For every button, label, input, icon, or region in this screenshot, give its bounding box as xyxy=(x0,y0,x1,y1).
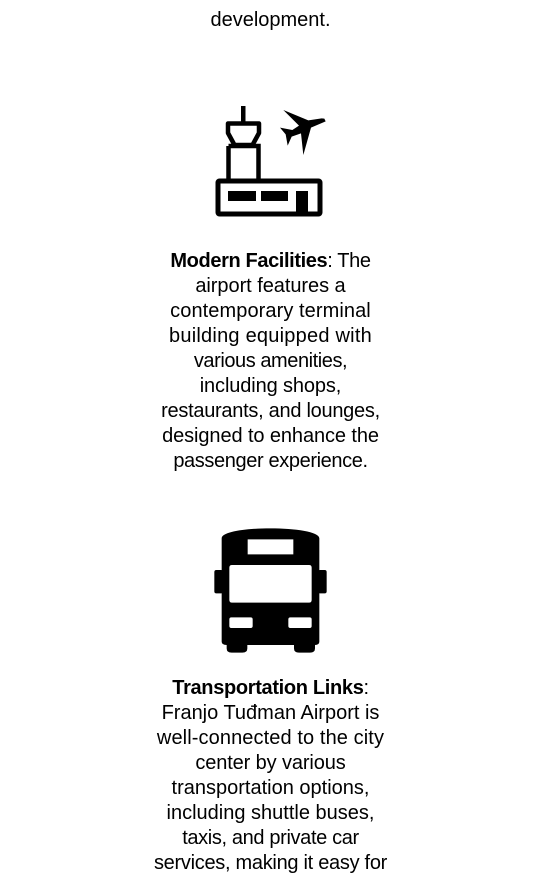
text block: closing line of previous section: development. xyxy=(210,9,331,31)
text block: modern facilities: contemporary terminal xyxy=(170,300,371,322)
text block: modern facilities: building equipped with xyxy=(169,325,372,347)
icon: control tower and airplane xyxy=(216,106,326,216)
text block: modern facilities xyxy=(161,250,380,472)
text block: transportation links: including shuttle buses, xyxy=(167,802,374,824)
text block: transportation links xyxy=(154,677,387,874)
text block: modern facilities: various amenities, xyxy=(194,350,347,372)
text block: modern facilities: Modern Facilities: The xyxy=(170,250,371,272)
icon: front view of bus xyxy=(214,528,327,653)
text block: transportation links: Franjo Tuđman Airport is xyxy=(162,702,379,724)
text block: transportation links: Transportation Links: xyxy=(172,677,369,699)
text block: modern facilities: designed to enhance the xyxy=(162,425,379,447)
text block: transportation links: services, making it easy for xyxy=(154,852,387,874)
text block: transportation links: taxis, and private car xyxy=(182,827,359,849)
text block: transportation links: center by various xyxy=(195,752,346,774)
text block: modern facilities: including shops, xyxy=(200,375,341,397)
text block: modern facilities: airport features a xyxy=(195,275,346,297)
text block: modern facilities: passenger experience. xyxy=(173,450,368,472)
text block: modern facilities: restaurants, and lounges, xyxy=(161,400,380,422)
text block: transportation links: well-connected to the city xyxy=(157,727,384,749)
text block: transportation links: transportation options, xyxy=(172,777,369,799)
